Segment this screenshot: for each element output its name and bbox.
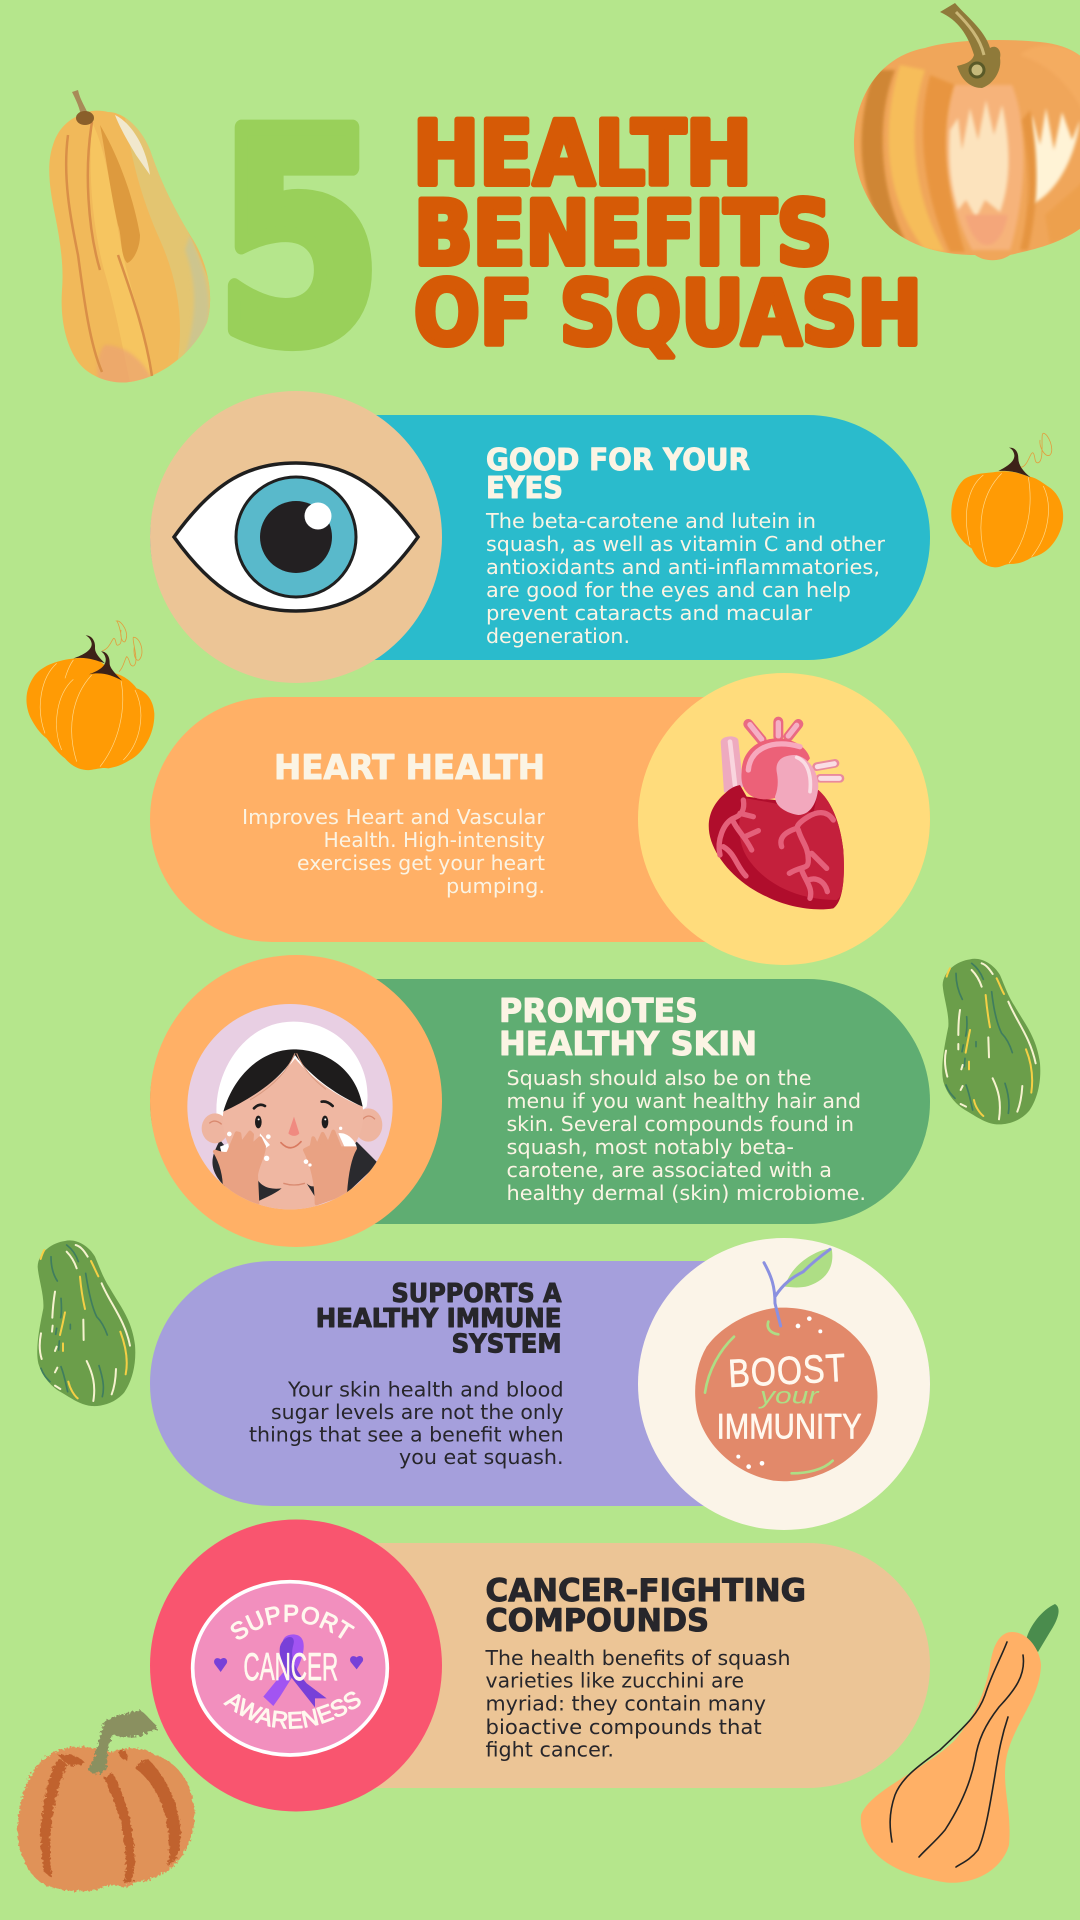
body text — [506, 1066, 866, 1205]
body text: Squash should also be on the — [506, 1066, 812, 1090]
icon circle — [638, 1238, 930, 1530]
heading — [486, 1573, 806, 1639]
body text: antioxidants and anti-inflammatories, — [486, 555, 880, 579]
heading: PROMOTES — [499, 992, 698, 1030]
body text: myriad: they contain many — [486, 1692, 766, 1716]
icon: boost your immunity apple: IMMUNITY — [717, 1408, 862, 1447]
illustration: orange butternut squash bottom right — [861, 1604, 1059, 1883]
panel: supports a healthy immune system — [150, 1238, 930, 1530]
title: OF SQUASH — [414, 262, 922, 365]
icon: face washing — [187, 1004, 393, 1213]
heading: SUPPORTS A — [392, 1279, 562, 1309]
icon: boost your immunity apple — [695, 1248, 877, 1481]
title: BENEFITS — [414, 182, 832, 285]
heading: GOOD FOR YOUR — [486, 443, 750, 478]
icon circle — [150, 391, 442, 683]
illustration: watercolor pumpkin — [854, 3, 1080, 260]
illustration: crayon pumpkin bottom left — [18, 1710, 195, 1891]
icon: boost your immunity apple: your — [757, 1382, 820, 1408]
body text — [485, 509, 886, 648]
body text: prevent cataracts and macular — [486, 601, 813, 625]
icon: cancer awareness badge: CANCER — [243, 1645, 338, 1689]
heading: HEALTHY IMMUNE — [316, 1304, 562, 1334]
icon circle — [150, 955, 442, 1247]
body text: Health. High-intensity — [324, 828, 545, 852]
body text: things that see a benefit when — [249, 1423, 564, 1447]
icon: heart — [709, 722, 844, 909]
pill background — [150, 979, 930, 1224]
heading: SYSTEM — [452, 1330, 562, 1360]
body text: bioactive compounds that — [486, 1715, 762, 1739]
title number 5: 5 — [216, 71, 382, 408]
title — [413, 102, 922, 365]
pill background — [150, 697, 930, 942]
body text: healthy dermal (skin) microbiome. — [506, 1181, 866, 1205]
body text: are good for the eyes and can help — [486, 578, 851, 602]
body text: squash, most notably beta- — [506, 1135, 794, 1159]
body text: menu if you want healthy hair and — [506, 1089, 861, 1113]
body text: The beta-carotene and lutein in — [485, 509, 816, 533]
body text: varieties like zucchini are — [486, 1669, 744, 1693]
illustration: green squash left — [37, 1240, 135, 1406]
body text — [242, 805, 546, 898]
icon: cancer awareness badge: AWARENESS — [223, 1692, 361, 1729]
panel: promotes healthy skin — [150, 955, 930, 1247]
pill background — [150, 1543, 930, 1788]
icon: cancer awareness badge — [190, 1580, 390, 1757]
illustration: double orange pumpkin left — [26, 621, 154, 770]
body text: Improves Heart and Vascular — [242, 805, 546, 829]
heading: EYES — [486, 471, 563, 506]
panel: heart health — [150, 673, 930, 965]
body text: carotene, are associated with a — [506, 1158, 832, 1182]
heading: CANCER-FIGHTING — [486, 1573, 806, 1609]
illustration: green squash right — [942, 959, 1040, 1124]
icon circle — [638, 673, 930, 965]
pill background — [150, 1261, 930, 1506]
body text: exercises get your heart — [297, 851, 545, 875]
heading — [486, 443, 750, 506]
icon circle — [150, 1520, 442, 1812]
body text: degeneration. — [486, 624, 630, 648]
body text: skin. Several compounds found in — [506, 1112, 854, 1136]
icon: eye — [174, 463, 418, 611]
body text — [249, 1378, 564, 1469]
body text: sugar levels are not the only — [271, 1400, 564, 1424]
heading: HEALTHY SKIN — [499, 1025, 757, 1063]
body text: fight cancer. — [486, 1738, 614, 1762]
illustration: small orange pumpkin right — [951, 433, 1063, 567]
body text: you eat squash. — [399, 1445, 564, 1469]
pill background — [150, 415, 930, 660]
illustration: watercolor butternut squash — [49, 90, 212, 390]
body text: Your skin health and blood — [287, 1378, 564, 1402]
title: HEALTH — [413, 102, 752, 205]
heading: COMPOUNDS — [486, 1603, 709, 1639]
panel: cancer-fighting compounds — [150, 1520, 930, 1812]
heading — [499, 992, 757, 1063]
body text: pumping. — [446, 874, 545, 898]
panel: good for your eyes — [150, 391, 930, 683]
icon: cancer awareness badge: SUPPORT — [230, 1604, 355, 1640]
heading: HEART HEALTH — [274, 748, 545, 788]
icon: boost your immunity apple: BOOST — [727, 1346, 848, 1396]
body text: squash, as well as vitamin C and other — [486, 532, 886, 556]
body text — [484, 1646, 790, 1762]
body text: The health benefits of squash — [484, 1646, 790, 1670]
heading — [316, 1279, 562, 1360]
